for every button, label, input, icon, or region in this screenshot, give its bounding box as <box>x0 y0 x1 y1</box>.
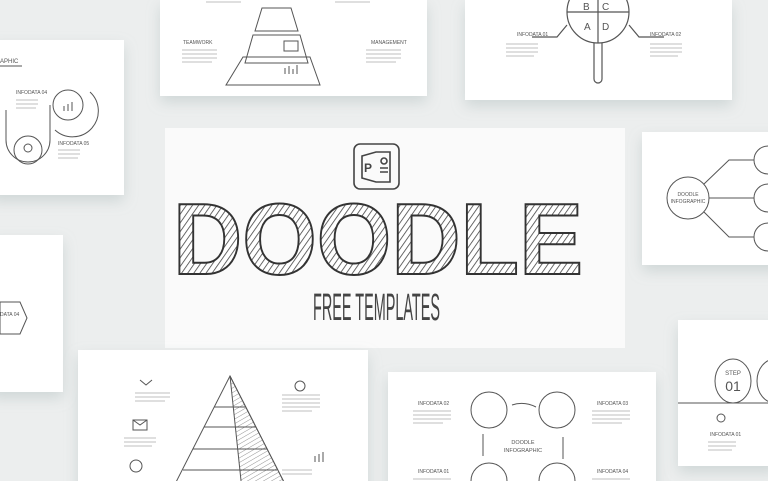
card: magnifier: INFODATA 02 <box>650 32 681 38</box>
card: right tree: DOODLE <box>677 192 699 198</box>
card: bottom left pyramid <box>78 350 368 481</box>
card: right tree <box>642 132 768 265</box>
card: magnifier: B <box>583 2 590 13</box>
card: bottom cycle: INFOGRAPHIC <box>504 448 542 454</box>
icon: powerpoint: P <box>364 161 372 175</box>
card: top pyramid: TEAMWORK <box>183 40 213 46</box>
card: bottom cycle: INFODATA 04 <box>597 469 628 475</box>
card: magnifier <box>465 0 732 100</box>
card: bottom cycle: INFODATA 02 <box>418 401 449 407</box>
card: left timeline: INFODATA 05 <box>58 141 89 147</box>
card: top pyramid <box>160 0 427 96</box>
card: bottom right step: STEP <box>725 371 741 377</box>
card: left timeline: APHIC <box>0 59 19 65</box>
card: bottom cycle: INFODATA 01 <box>418 469 449 475</box>
collage: FREE TEMPLATES <box>313 287 440 329</box>
card: right tree: INFOGRAPHIC <box>671 199 706 205</box>
center card <box>165 128 625 348</box>
card: left hexagon <box>0 235 63 392</box>
card: bottom right step <box>678 320 768 466</box>
card: left timeline <box>0 40 124 195</box>
card: magnifier: INFODATA 01 <box>517 32 548 38</box>
card: bottom cycle <box>388 372 656 481</box>
card: bottom right step: 01 <box>725 378 741 394</box>
card: left hexagon: DATA 04 <box>0 312 19 318</box>
card: magnifier: A <box>584 22 591 33</box>
card: magnifier: C <box>602 2 609 13</box>
card: top pyramid: MANAGEMENT <box>371 40 407 46</box>
icon: powerpoint <box>354 144 399 189</box>
card: bottom cycle: DOODLE <box>511 440 535 446</box>
card: left timeline: INFODATA 04 <box>16 90 47 96</box>
card: bottom right step: INFODATA 01 <box>710 432 741 438</box>
title: DOODLE <box>173 184 583 296</box>
card: magnifier: D <box>602 22 609 33</box>
card: bottom cycle: INFODATA 03 <box>597 401 628 407</box>
